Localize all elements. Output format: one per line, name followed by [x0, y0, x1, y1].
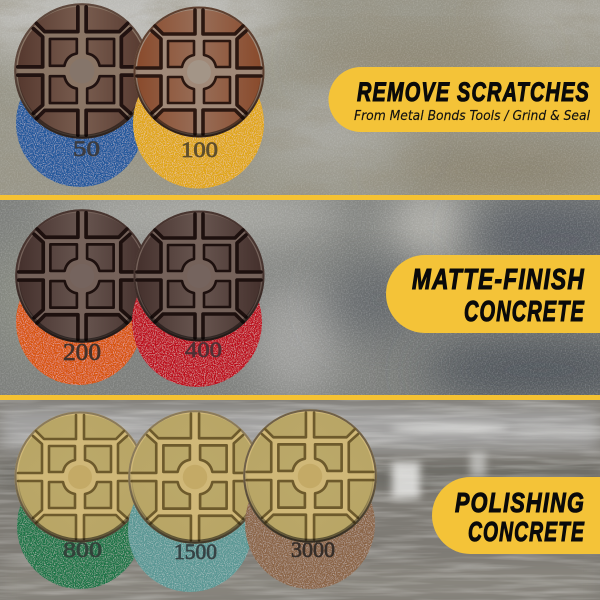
divider bar: bottom [0, 395, 600, 400]
panel: concrete background, remove scratches [0, 0, 600, 195]
pad set: grit 400: 400 [185, 337, 222, 362]
pad set: grit 800: 800 [63, 537, 102, 562]
pad set: grit 400 [132, 210, 264, 387]
pad set: grit 100: 100 [181, 137, 218, 162]
pad set: grit 3000 [243, 409, 377, 589]
callout: polishing concrete [432, 477, 600, 554]
pad set: grit 1500: 1500 [174, 539, 217, 564]
divider bar: top [0, 195, 600, 200]
pad set: grit 100 [133, 6, 264, 188]
callout: remove scratches [328, 67, 600, 132]
callout: matte-finish concrete [386, 255, 600, 333]
panel: concrete background, matte finish [0, 200, 600, 395]
panel: concrete background, polished [0, 400, 600, 600]
pad set: grit 800 [14, 412, 146, 589]
pad set: grit 3000: 3000 [291, 537, 335, 562]
pad set: grit 200: 200 [63, 340, 101, 366]
pad set: grit 200 [15, 209, 149, 385]
pad set: grit 1500 [128, 410, 262, 592]
pad set: grit 50 [14, 3, 150, 187]
pad set: grit 50: 50 [73, 136, 100, 161]
